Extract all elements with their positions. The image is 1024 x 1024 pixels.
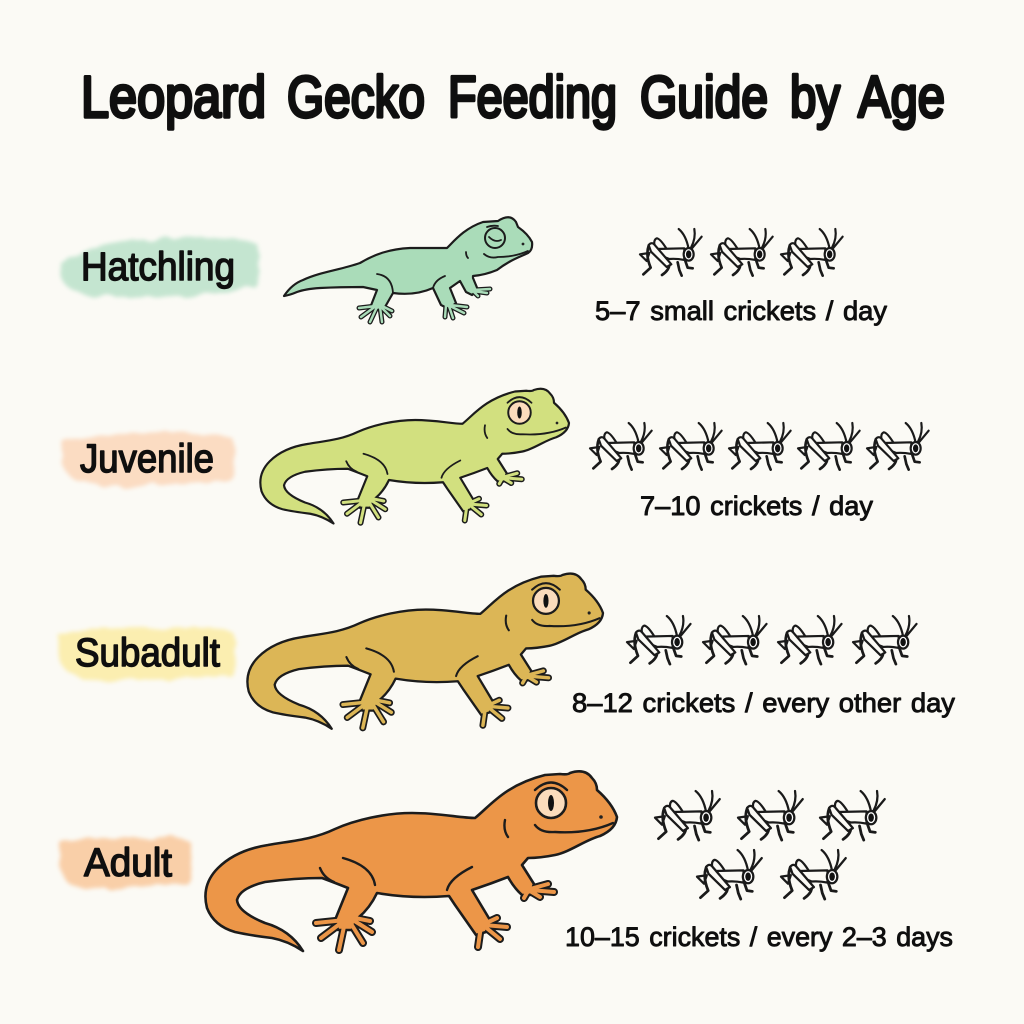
row: hatchling [60, 217, 887, 326]
crickets: 5 [590, 423, 929, 470]
crickets: 3 [640, 229, 843, 276]
gecko: hatchling [284, 217, 532, 322]
title: by [790, 65, 840, 130]
title: Age [858, 65, 945, 130]
crickets: 4 [627, 616, 917, 664]
row: subadult [58, 574, 955, 729]
title: Guide [640, 65, 768, 130]
title: Leopard [81, 65, 266, 130]
label: subadult: Subadult [75, 631, 220, 675]
gecko: adult [205, 771, 617, 951]
title [81, 65, 945, 130]
crickets: 5 in two rows [655, 791, 885, 899]
label: adult [60, 838, 192, 888]
caption: juvenile: 7–10 crickets / day [640, 491, 873, 521]
caption: adult: 10–15 crickets / every 2–3 days [565, 922, 953, 952]
row: juvenile [62, 389, 929, 524]
label: hatchling [60, 238, 259, 297]
gecko: juvenile [260, 389, 569, 524]
caption: subadult: 8–12 crickets / every other day [572, 688, 955, 718]
caption: hatchling: 5–7 small crickets / day [595, 296, 887, 326]
label: adult: Adult [84, 841, 172, 885]
row: adult [60, 771, 953, 952]
label: juvenile: Juvenile [80, 437, 214, 481]
title: Gecko [287, 65, 425, 130]
title: Feeding [448, 65, 617, 130]
label: hatchling: Hatchling [81, 245, 235, 289]
gecko: subadult [247, 574, 603, 729]
